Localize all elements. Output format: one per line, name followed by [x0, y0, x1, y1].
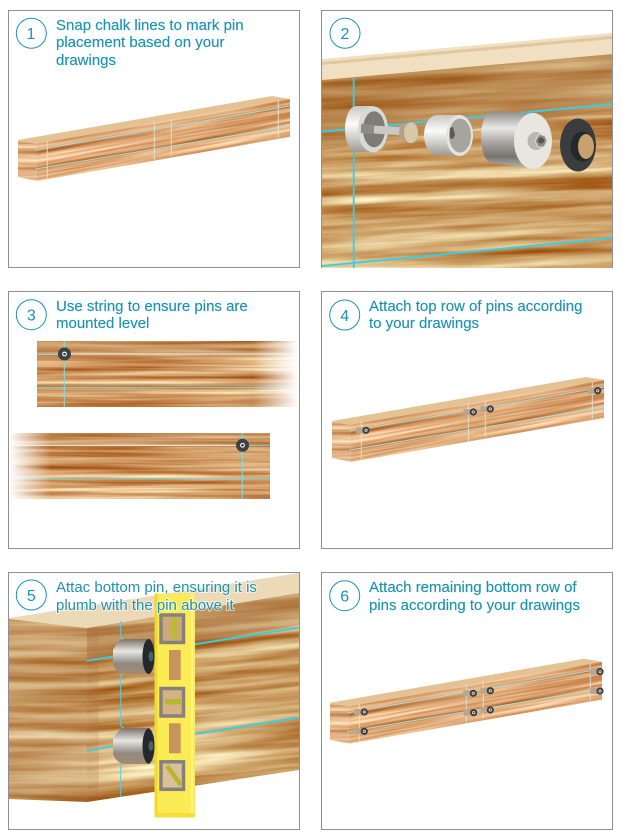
pin — [463, 408, 477, 416]
part: mounted cup with bolt — [345, 106, 418, 152]
panel: step 2 — [321, 10, 613, 268]
pin — [463, 690, 477, 697]
pin — [356, 427, 370, 434]
pin — [464, 709, 477, 716]
heading: step 1: placement based on your — [56, 34, 224, 51]
heading: step 4: Attach top row of pins according — [369, 298, 582, 315]
pin — [590, 668, 604, 675]
step number 6: 6 — [340, 588, 349, 606]
part: spacer cup — [424, 115, 473, 156]
panel: step 4 — [322, 292, 622, 548]
lower pin — [113, 728, 154, 764]
step number 2: 2 — [341, 26, 350, 43]
step number 1 — [16, 18, 46, 48]
step number 3 — [16, 300, 46, 330]
illustration: exploded pin assembly on beam — [322, 33, 613, 268]
illustration: beam with both pin rows — [330, 644, 622, 755]
panel: step 1 — [8, 10, 324, 268]
step number 6 — [330, 581, 360, 611]
upper pin — [113, 639, 154, 674]
part: black washer — [560, 118, 596, 172]
illustration: level against two pins — [9, 573, 299, 818]
illustration: lower beam view with string — [9, 433, 270, 499]
panel: step 6 — [322, 572, 622, 830]
pin — [354, 708, 368, 716]
vial: top — [161, 615, 184, 642]
pin — [480, 706, 494, 714]
pin — [588, 387, 601, 394]
vial: bottom — [161, 762, 184, 789]
pin — [354, 728, 368, 735]
heading: step 1: Snap chalk lines to mark pin — [56, 17, 244, 34]
panel: step 5 — [8, 572, 300, 830]
heading: step 5: plumb with the pin above it — [56, 597, 234, 614]
step number 4 — [330, 300, 360, 330]
panel: step 3 — [8, 292, 300, 548]
heading: step 3: Use string to ensure pins are — [56, 298, 248, 315]
step number 1: 1 — [27, 26, 36, 43]
step number 5 — [16, 580, 46, 610]
step number 5: 5 — [27, 588, 36, 605]
heading: step 4: to your drawings — [369, 315, 479, 332]
heading: step 6: pins according to your drawings — [369, 597, 580, 614]
illustration: upper beam view with string — [37, 341, 298, 407]
part: large barrel — [481, 111, 552, 169]
heading: step 5: Attac bottom pin, ensuring it is — [56, 579, 257, 596]
illustration: chalk-lined beam — [18, 81, 324, 192]
step number 4: 4 — [340, 308, 349, 325]
heading: step 6: Attach remaining bottom row of — [369, 579, 577, 596]
pin — [590, 687, 604, 695]
heading: step 3: mounted level — [56, 315, 149, 332]
step number 2 — [330, 18, 360, 48]
yellow spirit level — [154, 594, 195, 818]
pin — [480, 687, 494, 694]
pin — [480, 405, 494, 413]
step number 3: 3 — [27, 308, 36, 324]
heading: step 1: drawings — [56, 52, 116, 69]
vial: middle — [161, 688, 184, 716]
illustration: beam with top pins — [332, 362, 622, 473]
